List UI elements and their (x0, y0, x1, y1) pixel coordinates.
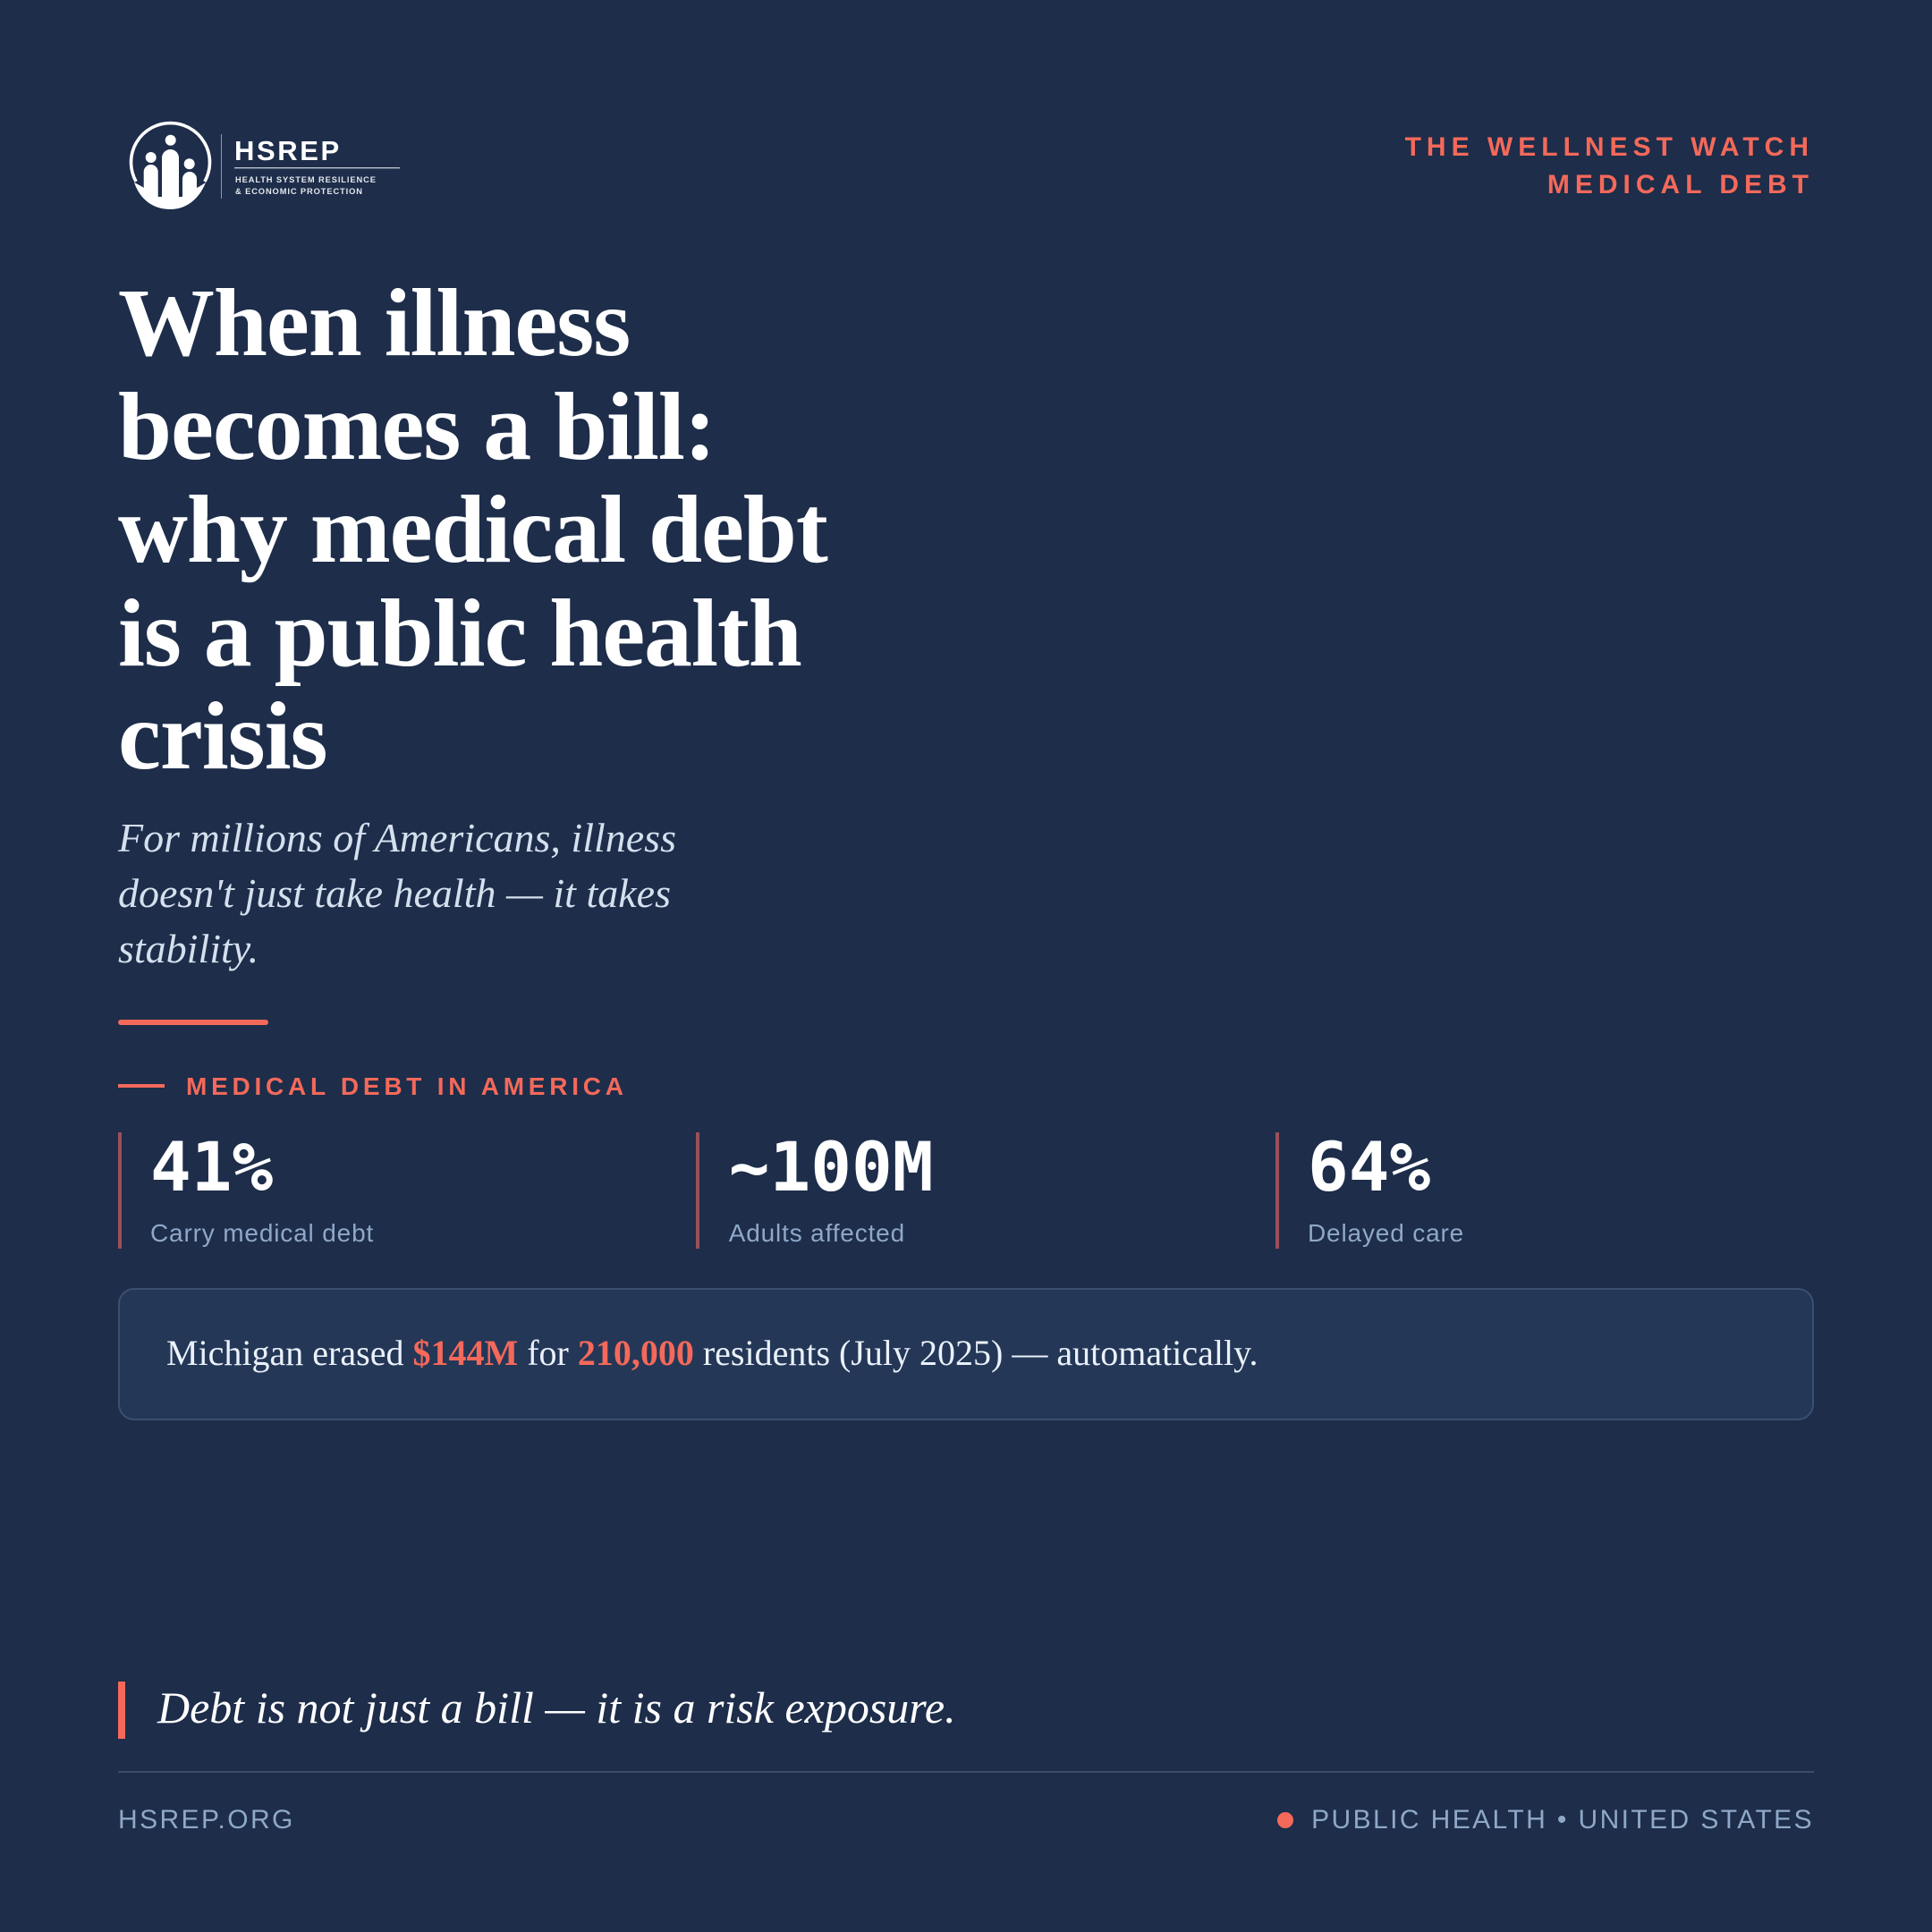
logo: HSREP: & ECONOMIC PROTECTION (235, 187, 363, 196)
title: crisis (118, 683, 326, 790)
subtitle (118, 815, 676, 971)
section heading: MEDICAL DEBT IN AMERICA (186, 1072, 628, 1100)
footer: site: HSREP.ORG (118, 1805, 295, 1835)
stat: 41%: Carry medical debt (150, 1219, 374, 1247)
title (118, 270, 828, 790)
title: is a public health (118, 580, 801, 687)
pull quote: Debt is not just a bill — it is a risk exposure. (157, 1682, 956, 1733)
stat: 41%: 41% (150, 1127, 273, 1207)
title: becomes a bill: (118, 374, 716, 479)
callout: Michigan: Michigan erased $144M for 210,000 residents (July 2025) — automatically. (166, 1333, 1258, 1373)
series label: MEDICAL DEBT (1547, 170, 1814, 199)
callout: Michigan (118, 1288, 1814, 1420)
series label (1404, 132, 1814, 199)
stat: 64%: 64% (1308, 1127, 1430, 1207)
logo: HSREP: HEALTH SYSTEM RESILIENCE (235, 175, 377, 184)
stat: ~100M: ~100M (729, 1127, 933, 1207)
title: why medical debt (118, 477, 827, 583)
subtitle: doesn't just take health — it takes (118, 870, 671, 916)
series label: THE WELLNEST WATCH (1405, 132, 1814, 162)
stat: ~100M (696, 1132, 964, 1249)
stat: 41% (118, 1132, 386, 1249)
stat: 64%: Delayed care (1308, 1219, 1464, 1247)
stat: 64% (1275, 1132, 1544, 1249)
footer rule (118, 1771, 1814, 1773)
logo: HSREP: HSREP (234, 135, 342, 166)
stat: ~100M: Adults affected (729, 1219, 905, 1247)
subtitle: stability. (118, 926, 258, 971)
subtitle: For millions of Americans, illness (118, 815, 676, 860)
title: When illness (118, 270, 630, 377)
accent rule (118, 1020, 268, 1025)
footer: tag: PUBLIC HEALTH • UNITED STATES (1311, 1805, 1814, 1835)
logo: HSREP (129, 122, 400, 209)
